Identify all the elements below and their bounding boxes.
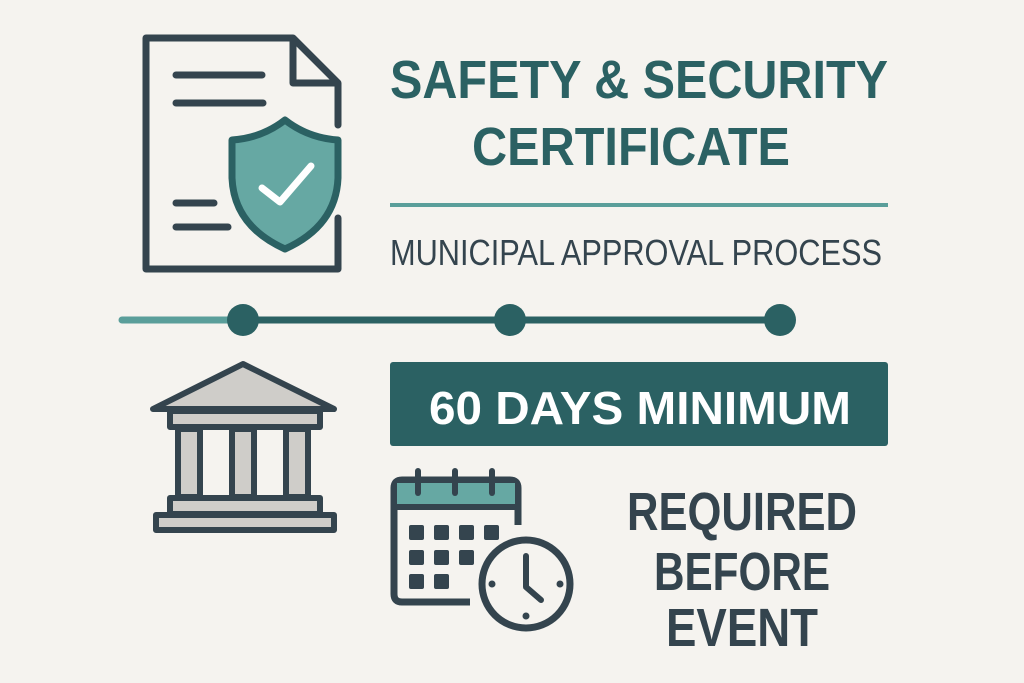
text: required before event: BEFORE — [654, 542, 830, 602]
text: required before event — [627, 482, 857, 658]
title: CERTIFICATE — [472, 117, 790, 177]
text: required before event: REQUIRED — [627, 482, 857, 542]
icon: document with shield — [146, 38, 338, 269]
title — [390, 50, 888, 177]
title: SAFETY & SECURITY — [390, 50, 888, 110]
icon: government building — [153, 364, 334, 530]
callout: 60 days minimum: 60 DAYS MINIMUM — [429, 382, 851, 434]
timeline — [122, 304, 796, 336]
callout: 60 days minimum — [390, 362, 888, 446]
icon: shield check — [232, 120, 338, 249]
subtitle: MUNICIPAL APPROVAL PROCESS — [390, 232, 882, 273]
icon: calendar with clock — [394, 471, 570, 628]
text: required before event: EVENT — [666, 598, 818, 658]
